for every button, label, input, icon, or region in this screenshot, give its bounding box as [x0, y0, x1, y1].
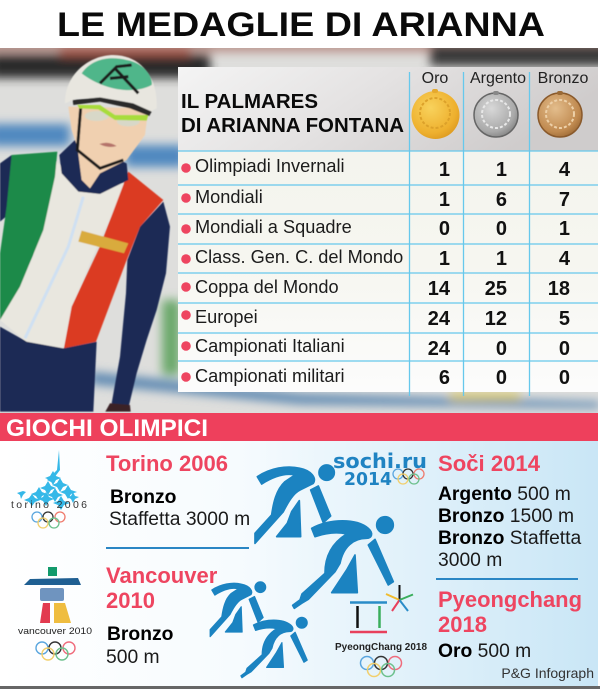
row: Europei — [181, 307, 570, 330]
text block: Torino 2006: Bronzo — [110, 487, 177, 508]
row: Mondiali a Squadre: Mondiali a Squadre — [195, 217, 352, 237]
Olympic rings — [360, 656, 402, 676]
text block: Pyeongchang 2018: Oro 500 m — [438, 641, 531, 662]
text block: Torino 2006: Torino 2006 — [106, 451, 228, 476]
row: Olimpiadi Invernali: 1 — [439, 159, 450, 181]
text block: Vancouver 2010: 2010 — [106, 588, 155, 613]
upper skater — [255, 465, 334, 543]
table heading: DI ARIANNA FONTANA — [181, 114, 404, 137]
white suit stripe — [0, 160, 127, 348]
row: Campionati Italiani: Campionati Italiani — [195, 336, 345, 356]
row: Mondiali: 7 — [559, 189, 570, 211]
row: Mondiali a Squadre: 1 — [559, 218, 570, 240]
credit: P&G Infograph — [501, 665, 594, 681]
red suit stripe — [64, 172, 163, 348]
navy legs and lower suit — [0, 327, 97, 412]
lower skater — [293, 517, 393, 608]
icon: skaters pictogram large — [210, 465, 393, 678]
row: Mondiali: Mondiali — [195, 187, 263, 207]
text block: Pyeongchang 2018: Pyeongchang — [438, 587, 582, 612]
logo: Sochi 2014 — [333, 449, 427, 490]
table grid lines — [178, 72, 598, 396]
Olympic rings — [32, 512, 65, 528]
row: Class. Gen. C. del Mondo: Class. Gen. C. del Mondo — [195, 247, 403, 267]
small upper skater — [210, 582, 266, 637]
text block: Vancouver 2010: Bronzo — [107, 624, 174, 645]
logo: Sochi 2014: sochi.ru — [333, 449, 427, 473]
name badge — [78, 231, 128, 253]
row: Europei: 5 — [559, 308, 570, 330]
row: Mondiali a Squadre — [181, 217, 570, 240]
row: Olimpiadi Invernali — [181, 156, 571, 181]
zip — [25, 197, 83, 338]
row: Campionati militari — [181, 366, 570, 389]
icon: silver medal — [474, 91, 518, 137]
row: Campionati militari: 0 — [559, 367, 570, 389]
row: Mondiali a Squadre: 0 — [496, 218, 507, 240]
row: Class. Gen. C. del Mondo: 4 — [559, 248, 571, 270]
title: LE MEDAGLIE DI ARIANNA — [57, 6, 545, 44]
icon: bronze medal — [538, 91, 582, 137]
column headings: Oro — [422, 70, 448, 87]
athlete figure — [0, 55, 170, 412]
column headings: Argento — [470, 70, 526, 87]
logo: Vancouver 2010 — [18, 567, 92, 660]
row: Europei: 24 — [428, 308, 451, 330]
green suit stripe — [0, 152, 57, 320]
row: Coppa del Mondo — [181, 277, 570, 300]
text block: Soči 2014: Soči 2014 — [438, 451, 541, 476]
column headings — [422, 70, 588, 87]
panel: palmares table — [178, 67, 598, 396]
text block: Pyeongchang 2018: 2018 — [438, 612, 487, 637]
text block: Soči 2014: Bronzo 1500 m — [438, 506, 574, 527]
row: Class. Gen. C. del Mondo: 1 — [496, 248, 507, 270]
row: Class. Gen. C. del Mondo: 1 — [439, 248, 450, 270]
text block: Vancouver 2010: 500 m — [106, 647, 160, 668]
left arm — [0, 155, 12, 222]
text block: Soči 2014: Bronzo Staffetta — [438, 528, 582, 549]
helmet — [65, 55, 157, 112]
right arm — [112, 202, 170, 408]
row: Mondiali — [181, 187, 570, 211]
face and neck — [68, 107, 148, 188]
text block: Soči 2014: Argento 500 m — [438, 484, 571, 505]
eyes and lips — [85, 111, 109, 121]
row: Campionati militari: Campionati militari — [195, 366, 345, 386]
row: Coppa del Mondo: 18 — [548, 278, 570, 300]
table heading: IL PALMARES — [181, 90, 318, 113]
row: Campionati Italiani: 24 — [428, 338, 451, 360]
row: Campionati Italiani: 0 — [496, 338, 507, 360]
chin strap — [77, 108, 123, 168]
row: Campionati Italiani — [181, 336, 570, 360]
row: Olimpiadi Invernali: Olimpiadi Invernali — [195, 156, 345, 176]
section banner: Giochi Olimpici: GIOCHI OLIMPICI — [6, 415, 208, 442]
row: Olimpiadi Invernali: 4 — [559, 159, 571, 181]
row: Europei: 12 — [485, 308, 507, 330]
section banner: Giochi Olimpici — [0, 413, 598, 442]
row: Mondiali: 6 — [496, 189, 507, 211]
icon: gold medal — [412, 89, 460, 139]
text block: Soči 2014: 3000 m — [438, 550, 502, 571]
row: Coppa del Mondo: 25 — [485, 278, 507, 300]
text block: Pyeongchang 2018 — [438, 587, 582, 662]
logo: Torino 2006 — [11, 450, 87, 528]
text block: Vancouver 2010 — [106, 563, 218, 668]
row: Mondiali: 1 — [439, 189, 450, 211]
green glasses — [77, 105, 148, 121]
row: Coppa del Mondo: Coppa del Mondo — [195, 277, 339, 297]
Olympic rings — [36, 642, 75, 660]
column headings: Bronzo — [538, 70, 588, 87]
Olympic rings — [393, 469, 424, 484]
text block: Torino 2006: Staffetta 3000 m — [109, 509, 250, 530]
small lower skater — [241, 617, 307, 678]
panel: Giochi Olimpici background — [0, 441, 598, 686]
row: Campionati militari: 6 — [439, 367, 450, 389]
row: Class. Gen. C. del Mondo — [181, 247, 571, 270]
Vancouver wordmark: vancouver 2010 — [18, 626, 92, 637]
row: Coppa del Mondo: 14 — [428, 278, 451, 300]
logo: Sochi 2014: 2014 — [344, 469, 392, 490]
Torino wordmark: torino 2006 — [11, 499, 87, 511]
glove — [105, 403, 131, 412]
row: Campionati Italiani: 0 — [559, 338, 570, 360]
logo: PyeongChang 2018 — [335, 585, 427, 676]
row: Mondiali a Squadre: 0 — [439, 218, 450, 240]
text block: Torino 2006 — [106, 451, 250, 530]
text block: Vancouver 2010: Vancouver — [106, 563, 218, 588]
photo: Arianna Fontana skating — [0, 40, 600, 413]
collar — [59, 140, 128, 194]
row: Olimpiadi Invernali: 1 — [496, 159, 507, 181]
PyeongChang wordmark: PyeongChang 2018 — [335, 641, 427, 653]
row: Europei: Europei — [195, 307, 258, 327]
text block: Soči 2014 — [438, 451, 582, 571]
row: Campionati militari: 0 — [496, 367, 507, 389]
